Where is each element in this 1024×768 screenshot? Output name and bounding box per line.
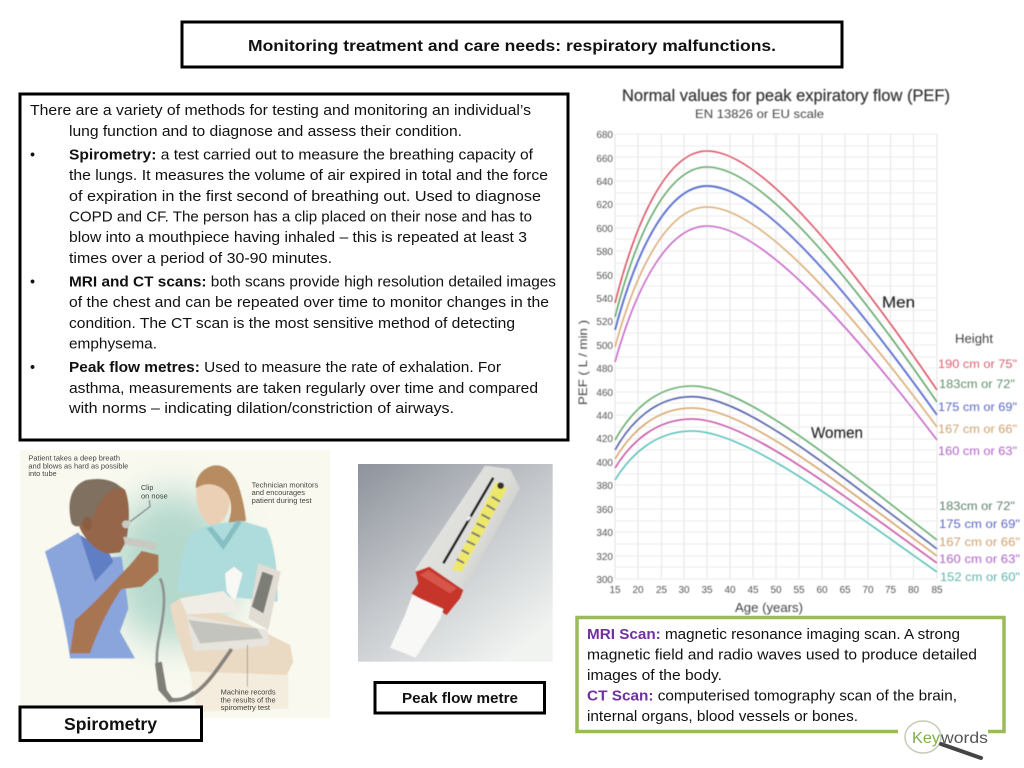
bullet: spirometry bbox=[30, 148, 548, 267]
height legend bbox=[938, 332, 1020, 584]
height legend: 167 cm or 66" bbox=[938, 422, 1017, 436]
spirometry machine bbox=[170, 563, 293, 712]
metre body bbox=[415, 466, 520, 590]
bullet: spirometry: COPD and CF. The person has a clip placed on their nose and has to bbox=[69, 210, 532, 226]
keyword text: images of the body. bbox=[587, 668, 722, 684]
patient bbox=[45, 479, 158, 658]
y axis labels: 600 bbox=[596, 224, 613, 235]
women curves bbox=[615, 386, 937, 572]
y axis labels: 660 bbox=[596, 154, 613, 165]
x axis labels: 20 bbox=[632, 585, 644, 596]
height legend: 190 cm or 75" bbox=[938, 357, 1017, 371]
height legend: 152 cm or 60" bbox=[940, 570, 1020, 584]
x axis labels: 50 bbox=[770, 585, 782, 596]
illustration annotations: and encourages bbox=[252, 490, 306, 497]
x axis labels: 45 bbox=[747, 585, 759, 596]
x axis labels: 60 bbox=[816, 585, 828, 596]
x axis labels: 85 bbox=[931, 585, 943, 596]
intro text bbox=[30, 103, 531, 140]
y axis labels bbox=[596, 130, 613, 586]
y axis title: PEF ( L / min ) bbox=[576, 320, 590, 405]
y axis labels: 460 bbox=[596, 388, 613, 399]
x axis labels: 40 bbox=[724, 585, 736, 596]
y axis labels: 560 bbox=[596, 271, 613, 282]
y axis labels: 440 bbox=[596, 411, 613, 422]
illustration annotations: Technician monitors bbox=[252, 482, 319, 489]
y axis labels: 340 bbox=[596, 528, 613, 539]
red collar bbox=[412, 567, 463, 615]
illustration annotations: Machine records bbox=[221, 690, 276, 697]
x axis labels: 70 bbox=[862, 585, 874, 596]
bullet: spirometry: • bbox=[30, 148, 35, 164]
illustration annotations: and blows as hard as possible bbox=[28, 463, 128, 470]
x axis labels: 35 bbox=[701, 585, 713, 596]
keyword text: MRI Scan: magnetic resonance imaging scan. A strong bbox=[587, 627, 960, 643]
bullet: spirometry: of expiration in the first second of breathing out. Used to diagnose bbox=[69, 189, 541, 205]
y axis labels: 300 bbox=[596, 575, 613, 586]
mouthpiece and tubing bbox=[122, 500, 223, 702]
x axis labels: 80 bbox=[908, 585, 919, 596]
illustration: spirometry test bbox=[20, 450, 330, 718]
y axis labels: 580 bbox=[596, 247, 613, 258]
label: peak flow metre: Peak flow metre bbox=[402, 690, 518, 707]
icon: keywords magnifier logo bbox=[898, 721, 988, 758]
panel: methods for testing lung function bbox=[20, 94, 568, 440]
title box bbox=[182, 22, 842, 67]
x axis labels: 65 bbox=[839, 585, 851, 596]
label: men: Men bbox=[882, 294, 915, 312]
illustration annotations bbox=[28, 456, 319, 712]
y axis labels: 680 bbox=[596, 130, 613, 141]
y axis labels: 420 bbox=[596, 434, 613, 445]
intro text: There are a variety of methods for testing and monitoring an individual’s bbox=[30, 103, 531, 119]
y axis labels: 640 bbox=[596, 177, 613, 188]
y axis labels: 540 bbox=[596, 294, 613, 305]
label: spirometry bbox=[20, 707, 202, 740]
height legend: 183cm or 72" bbox=[939, 377, 1015, 391]
y axis labels: 320 bbox=[596, 552, 613, 563]
chart title: Normal values for peak expiratory flow (PEF) bbox=[622, 86, 950, 105]
y axis labels: 520 bbox=[596, 317, 613, 328]
chart subtitle: EN 13826 or EU scale bbox=[695, 107, 824, 121]
keyword text: internal organs, blood vessels or bones. bbox=[587, 709, 858, 725]
illustration annotations: the results of the bbox=[221, 697, 276, 704]
bullet: MRI and CT scans: of the chest and can be repeated over time to monitor changes in the bbox=[69, 295, 549, 311]
metre scale bbox=[452, 482, 507, 572]
y axis labels: 620 bbox=[596, 200, 613, 211]
bullet: MRI and CT scans: • bbox=[30, 274, 35, 290]
icon: keywords magnifier logo: Key bbox=[912, 730, 940, 747]
bullet: peak flow metres bbox=[30, 360, 538, 417]
white mouthpiece bbox=[390, 595, 443, 658]
chart: normal values for peak expiratory flow bbox=[576, 86, 1020, 615]
men curves bbox=[615, 151, 937, 440]
height legend: 183cm or 72" bbox=[939, 499, 1015, 513]
y axis labels: 480 bbox=[596, 364, 613, 375]
photo: peak flow metre bbox=[358, 464, 553, 662]
bullet: peak flow metres: with norms – indicating dilation/constriction of airways. bbox=[68, 401, 454, 417]
y axis labels: 380 bbox=[596, 481, 613, 492]
intro text: lung function and to diagnose and assess their condition. bbox=[69, 124, 462, 140]
label: peak flow metre bbox=[375, 682, 544, 713]
label: women: Women bbox=[811, 425, 863, 442]
x axis labels: 55 bbox=[793, 585, 805, 596]
illustration annotations: spirometry test bbox=[221, 705, 270, 712]
bullet: MRI and CT scans bbox=[30, 274, 556, 352]
illustration annotations: into tube bbox=[28, 471, 57, 478]
label: spirometry: Spirometry bbox=[64, 714, 157, 734]
illustration annotations: patient during test bbox=[252, 498, 312, 505]
height legend: 167 cm or 66" bbox=[939, 535, 1020, 549]
bullet: peak flow metres: • bbox=[30, 360, 35, 376]
x axis labels bbox=[609, 585, 943, 596]
height legend: 175 cm or 69" bbox=[939, 517, 1020, 531]
illustration annotations: Clip bbox=[141, 485, 153, 492]
bullet: peak flow metres: Peak flow metres: Used to measure the rate of exhalation. For bbox=[69, 360, 501, 376]
icon: keywords magnifier logo: words bbox=[940, 730, 988, 747]
y axis labels: 400 bbox=[596, 458, 613, 469]
bullet: MRI and CT scans: MRI and CT scans: both scans provide high resolution detailed images bbox=[69, 274, 556, 290]
bullet: MRI and CT scans: condition. The CT scan is the most sensitive method of detecting bbox=[69, 316, 515, 332]
technician bbox=[177, 465, 278, 602]
height legend: 160 cm or 63" bbox=[939, 552, 1020, 566]
bullet: spirometry: blow into a mouthpiece having inhaled – this is repeated at least 3 bbox=[69, 230, 527, 246]
keyword text bbox=[587, 627, 977, 725]
bullet: MRI and CT scans: emphysema. bbox=[69, 336, 157, 352]
height legend: Height bbox=[955, 332, 994, 346]
keyword text: CT Scan: computerised tomography scan of the brain, bbox=[587, 688, 957, 704]
y axis labels: 500 bbox=[596, 341, 613, 352]
y axis labels: 360 bbox=[596, 505, 613, 516]
bullet: spirometry: Spirometry: a test carried out to measure the breathing capacity of bbox=[69, 148, 534, 164]
keyword text: magnetic field and radio waves used to produce detailed bbox=[587, 648, 977, 664]
illustration annotations: on nose bbox=[141, 493, 168, 500]
x axis labels: 75 bbox=[885, 585, 896, 596]
bullet: spirometry: the lungs. It measures the volume of air expired in total and the force bbox=[69, 168, 548, 184]
panel: keywords bbox=[577, 618, 1004, 758]
x axis labels: 30 bbox=[678, 585, 690, 596]
bullet: peak flow metres: asthma, measurements are taken regularly over time and compared bbox=[69, 381, 538, 397]
height legend: 175 cm or 69" bbox=[938, 400, 1017, 414]
x axis labels: 25 bbox=[656, 585, 667, 596]
illustration annotations: Patient takes a deep breath bbox=[28, 456, 120, 463]
bullet: spirometry: times over a period of 30-90 minutes. bbox=[69, 251, 332, 267]
height legend: 160 cm or 63" bbox=[938, 444, 1017, 458]
title box: Monitoring treatment and care needs: respiratory malfunctions. bbox=[248, 38, 776, 55]
x axis labels: 15 bbox=[609, 585, 621, 596]
x axis title: Age (years) bbox=[735, 601, 803, 615]
